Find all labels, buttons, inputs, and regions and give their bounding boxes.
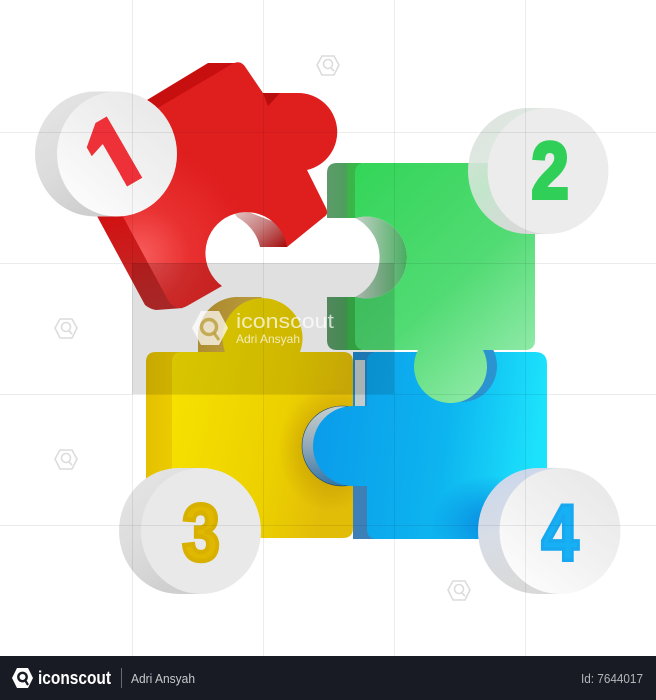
badge 1	[35, 92, 177, 217]
blue socket wall	[427, 330, 497, 402]
blue side inner gap upper	[355, 360, 365, 406]
badge 3 face	[141, 468, 261, 594]
number 4: 4	[541, 487, 579, 577]
yellow front face	[172, 298, 353, 538]
yellow side wall	[146, 352, 185, 538]
shadow under blue knob	[278, 388, 382, 512]
blue front face	[313, 352, 547, 539]
central watermark text: iconscout	[236, 311, 335, 333]
number 1: 1	[66, 92, 169, 214]
badge 1 face	[57, 92, 177, 216]
badge 2	[468, 108, 608, 234]
yellow knob side	[198, 297, 262, 352]
small watermark icon lower left	[55, 450, 77, 469]
badge 3	[119, 468, 261, 594]
blue side wall upper	[353, 352, 375, 408]
red left wall	[97, 215, 183, 310]
badge 1 side	[35, 92, 117, 217]
badge 2 face	[488, 108, 608, 234]
number 3: 3	[182, 487, 220, 577]
yellow puzzle piece	[146, 297, 382, 538]
footer brand: iconscout	[38, 668, 111, 688]
badge 2 side	[468, 108, 548, 234]
footer bar	[0, 656, 656, 700]
footer id: Id: 7644017	[581, 671, 643, 686]
number 2: 2	[531, 125, 569, 215]
green side wall lower	[327, 297, 362, 350]
footer separator	[121, 668, 122, 688]
red socket wall	[228, 204, 300, 247]
red puzzle piece	[87, 62, 337, 310]
small watermark icon left	[55, 319, 77, 338]
green front face	[355, 163, 535, 403]
badge 4	[478, 468, 620, 594]
blue side wall lower	[353, 484, 375, 539]
green socket wall	[355, 216, 407, 299]
small watermark icon bottom	[448, 581, 470, 600]
footer logo	[12, 668, 33, 688]
badge 4 face	[500, 468, 620, 594]
badge 4 side	[478, 468, 560, 594]
green side wall upper	[327, 163, 362, 218]
blue puzzle piece	[302, 350, 547, 539]
blue knob side	[302, 406, 382, 486]
badge 3 side	[119, 468, 201, 594]
central watermark text	[236, 311, 335, 346]
central watermark text: Adri Ansyah	[236, 332, 300, 346]
watermark band	[132, 263, 394, 394]
small watermark icon top	[317, 56, 339, 75]
footer author: Adri Ansyah	[131, 671, 195, 686]
red top wall	[147, 63, 235, 112]
blue shade near badge	[439, 481, 500, 539]
red knob notch	[263, 93, 280, 106]
red front face	[87, 62, 337, 308]
central watermark logo	[192, 311, 228, 345]
green puzzle piece	[327, 163, 535, 403]
